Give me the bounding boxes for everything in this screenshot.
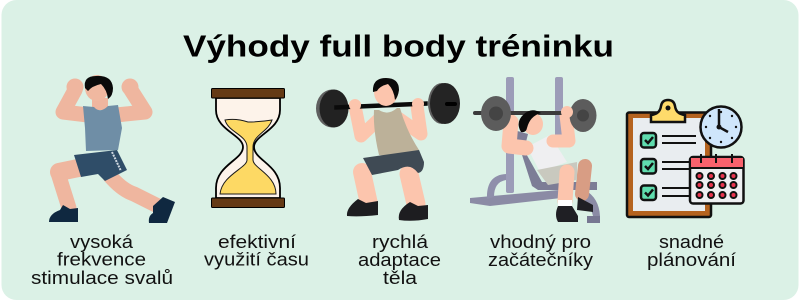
label: time use: efektivní bbox=[218, 231, 297, 252]
label: planning: plánování bbox=[647, 249, 737, 270]
icon: hourglass bbox=[212, 88, 284, 208]
label: time use bbox=[204, 231, 309, 270]
label: beginners: vhodný pro bbox=[490, 231, 591, 252]
label: beginners: začátečníky bbox=[488, 249, 594, 270]
label: muscle stimulation: vysoká bbox=[70, 231, 134, 252]
label: muscle stimulation: frekvence bbox=[57, 248, 146, 270]
label: adaptation: rychlá bbox=[372, 231, 429, 252]
icon: checklist, clock and calendar bbox=[627, 100, 744, 217]
label: muscle stimulation: stimulace svalů bbox=[31, 267, 173, 288]
label: adaptation: adaptace bbox=[358, 249, 441, 270]
label: planning bbox=[647, 231, 737, 270]
label: planning: snadné bbox=[659, 231, 724, 252]
label: adaptation: těla bbox=[383, 267, 418, 288]
icon: man on incline bench press bbox=[470, 77, 600, 223]
label: muscle stimulation bbox=[31, 231, 173, 288]
label: beginners bbox=[488, 231, 594, 270]
icon: man flexing in a lunge bbox=[49, 75, 175, 223]
icon: man squatting with barbell bbox=[316, 78, 460, 221]
label: time use: využití času bbox=[204, 248, 309, 270]
label: adaptation bbox=[358, 231, 441, 288]
title: Výhody full body tréninku bbox=[183, 28, 614, 64]
